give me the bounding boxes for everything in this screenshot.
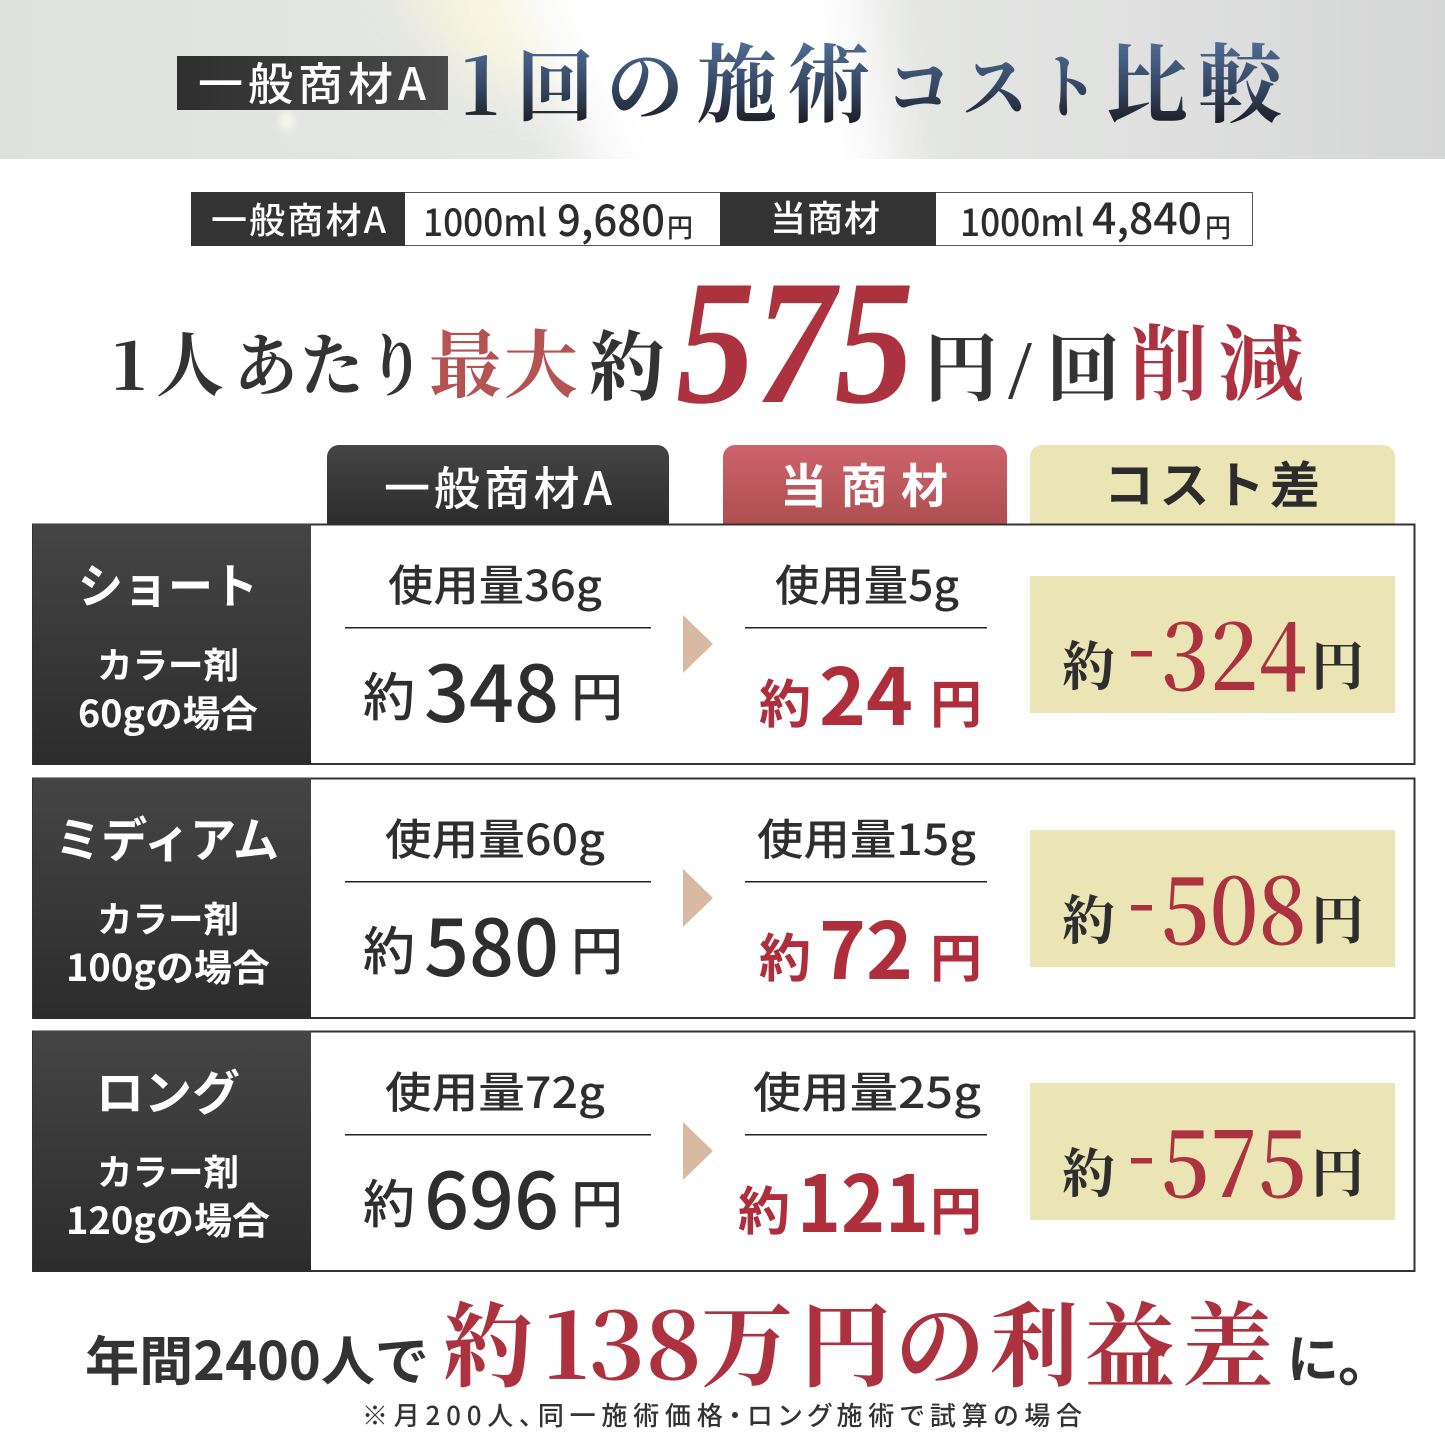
- bottom conclusion: 約: [443, 1274, 533, 1406]
- cost difference box: 約: [1062, 1132, 1115, 1208]
- row label: ロング: [96, 1054, 240, 1124]
- headline: 回: [1046, 310, 1120, 417]
- headline: 大: [504, 307, 578, 413]
- our usage and cost: 約: [738, 1170, 790, 1245]
- header banner: [0, 0, 1445, 159]
- our usage and cost: 円: [930, 663, 982, 738]
- cost difference box: 円: [1311, 625, 1364, 701]
- general usage and cost: 約: [363, 910, 415, 985]
- bottom conclusion: 万: [701, 1274, 793, 1406]
- our usage and cost: 約: [759, 663, 811, 738]
- row label: 100gの場合: [66, 938, 270, 992]
- cost difference box: 324: [1161, 586, 1307, 717]
- bottom conclusion: 年間2400人で: [85, 1320, 429, 1396]
- title: 1: [461, 23, 499, 138]
- row label: カラー剤: [97, 891, 239, 943]
- headline: 約: [589, 307, 665, 416]
- our usage and cost: 使用量25g: [753, 1059, 981, 1121]
- column tab: 一般商材A: [327, 445, 669, 524]
- arrow: [683, 1122, 713, 1180]
- headline: あ: [234, 313, 298, 410]
- title: 回: [516, 23, 594, 138]
- cost difference box: 508: [1161, 840, 1307, 971]
- title: 較: [1198, 16, 1287, 140]
- price label: ours: [720, 190, 936, 246]
- cost difference box: 約: [1062, 625, 1115, 701]
- cost difference box: 約: [1062, 879, 1115, 955]
- headline: 1: [112, 314, 146, 409]
- headline: 人: [156, 310, 224, 411]
- general usage and cost: [345, 552, 651, 745]
- title: ス: [962, 32, 1028, 133]
- price value: general: 円: [667, 208, 693, 245]
- bottom conclusion: の: [895, 1274, 985, 1406]
- our usage and cost: 121: [797, 1143, 929, 1255]
- price value: ours: 円: [1205, 208, 1231, 245]
- general usage and cost: 約: [363, 656, 415, 731]
- title: 術: [788, 16, 870, 140]
- general usage and cost: [345, 1059, 651, 1252]
- headline: 最: [429, 307, 501, 413]
- general usage and cost: 使用量60g: [385, 806, 605, 868]
- row label: 60gの場合: [78, 684, 258, 738]
- general usage and cost: 円: [571, 1163, 623, 1238]
- bottom conclusion: に: [1287, 1318, 1339, 1393]
- our usage and cost: 約: [759, 917, 811, 992]
- cost difference box: 円: [1311, 879, 1364, 955]
- column tab: コスト差: コスト差: [1104, 446, 1320, 518]
- our usage and cost: 72: [819, 890, 913, 1002]
- bottom conclusion: [85, 1274, 1392, 1406]
- row label: カラー剤: [97, 1144, 239, 1196]
- bottom conclusion: 138: [544, 1274, 702, 1406]
- cost difference box: [1030, 1083, 1395, 1224]
- title: コ: [886, 32, 952, 133]
- title: 施: [697, 16, 777, 140]
- row label: [78, 547, 258, 738]
- our usage and cost: [745, 806, 987, 1002]
- our usage and cost: [738, 1059, 987, 1255]
- headline: /: [1008, 324, 1033, 417]
- bottom conclusion: 。: [1338, 1318, 1392, 1397]
- row label: [66, 1054, 270, 1245]
- row: ロング: [33, 1031, 1414, 1272]
- title: [461, 16, 1287, 140]
- price label: ours: 当商材: [770, 190, 880, 242]
- footnote: ※月200人、同一施術価格・ロング施術で試算の場合: [362, 1396, 1082, 1433]
- price value: ours: [960, 185, 1231, 247]
- our usage and cost: 円: [930, 1170, 982, 1245]
- our usage and cost: 使用量15g: [757, 806, 976, 868]
- bottom conclusion: 益: [1085, 1274, 1175, 1406]
- general usage and cost: 580: [424, 887, 559, 999]
- cost difference box: 575: [1161, 1093, 1307, 1224]
- header label: 一般商材A: 一般商材A: [198, 48, 426, 113]
- our usage and cost: 使用量5g: [775, 552, 959, 614]
- general usage and cost: 約: [363, 1163, 415, 1238]
- headline: 円: [924, 310, 998, 417]
- column tab: 一般商材A: 一般商材A: [384, 453, 612, 519]
- headline: 575: [676, 243, 914, 441]
- title: ト: [1038, 32, 1098, 133]
- general usage and cost: 使用量36g: [388, 552, 602, 614]
- our usage and cost: [745, 552, 987, 748]
- our usage and cost: 24: [819, 636, 913, 748]
- row: ショート: [33, 524, 1414, 765]
- general usage and cost: 348: [424, 633, 559, 745]
- row label: [55, 801, 279, 992]
- arrow: [683, 869, 713, 927]
- arrow: [683, 615, 713, 673]
- row label: カラー剤: [97, 637, 239, 689]
- bottom conclusion: 差: [1183, 1274, 1273, 1406]
- price value: ours: 4,840: [1092, 185, 1202, 247]
- title: 比: [1106, 16, 1188, 140]
- general usage and cost: 使用量72g: [385, 1059, 605, 1121]
- bottom conclusion: 円: [800, 1274, 892, 1406]
- bottom conclusion: 利: [990, 1274, 1078, 1406]
- row label: ミディアム: [55, 801, 279, 871]
- row: ミディアム: [33, 778, 1414, 1019]
- headline: 削: [1130, 300, 1207, 417]
- general usage and cost: [345, 806, 651, 999]
- headline: り: [368, 313, 424, 410]
- price value: ours: 1000ml: [960, 193, 1084, 247]
- headline: 減: [1218, 300, 1304, 417]
- column tab: 当商材: [723, 445, 1007, 524]
- price value: general: 1000ml: [423, 193, 547, 247]
- headline: [112, 243, 1304, 441]
- price label: general: 一般商材A: [211, 192, 387, 244]
- general usage and cost: 円: [571, 910, 623, 985]
- general usage and cost: 円: [571, 656, 623, 731]
- general usage and cost: 696: [424, 1140, 559, 1252]
- price value: general: 9,680: [557, 187, 665, 249]
- title: の: [606, 23, 684, 138]
- price value: general: [423, 187, 693, 249]
- column tab: コスト差: [1030, 445, 1395, 524]
- cost difference box: [1030, 576, 1395, 717]
- cost difference box: [1030, 830, 1395, 971]
- cost difference box: 円: [1311, 1132, 1364, 1208]
- price bar: [191, 185, 1252, 249]
- row label: ショート: [78, 547, 258, 617]
- column tab: 当商材: 当商材: [780, 448, 948, 517]
- our usage and cost: 円: [930, 917, 982, 992]
- headline: た: [300, 313, 364, 410]
- row label: 120gの場合: [66, 1191, 270, 1245]
